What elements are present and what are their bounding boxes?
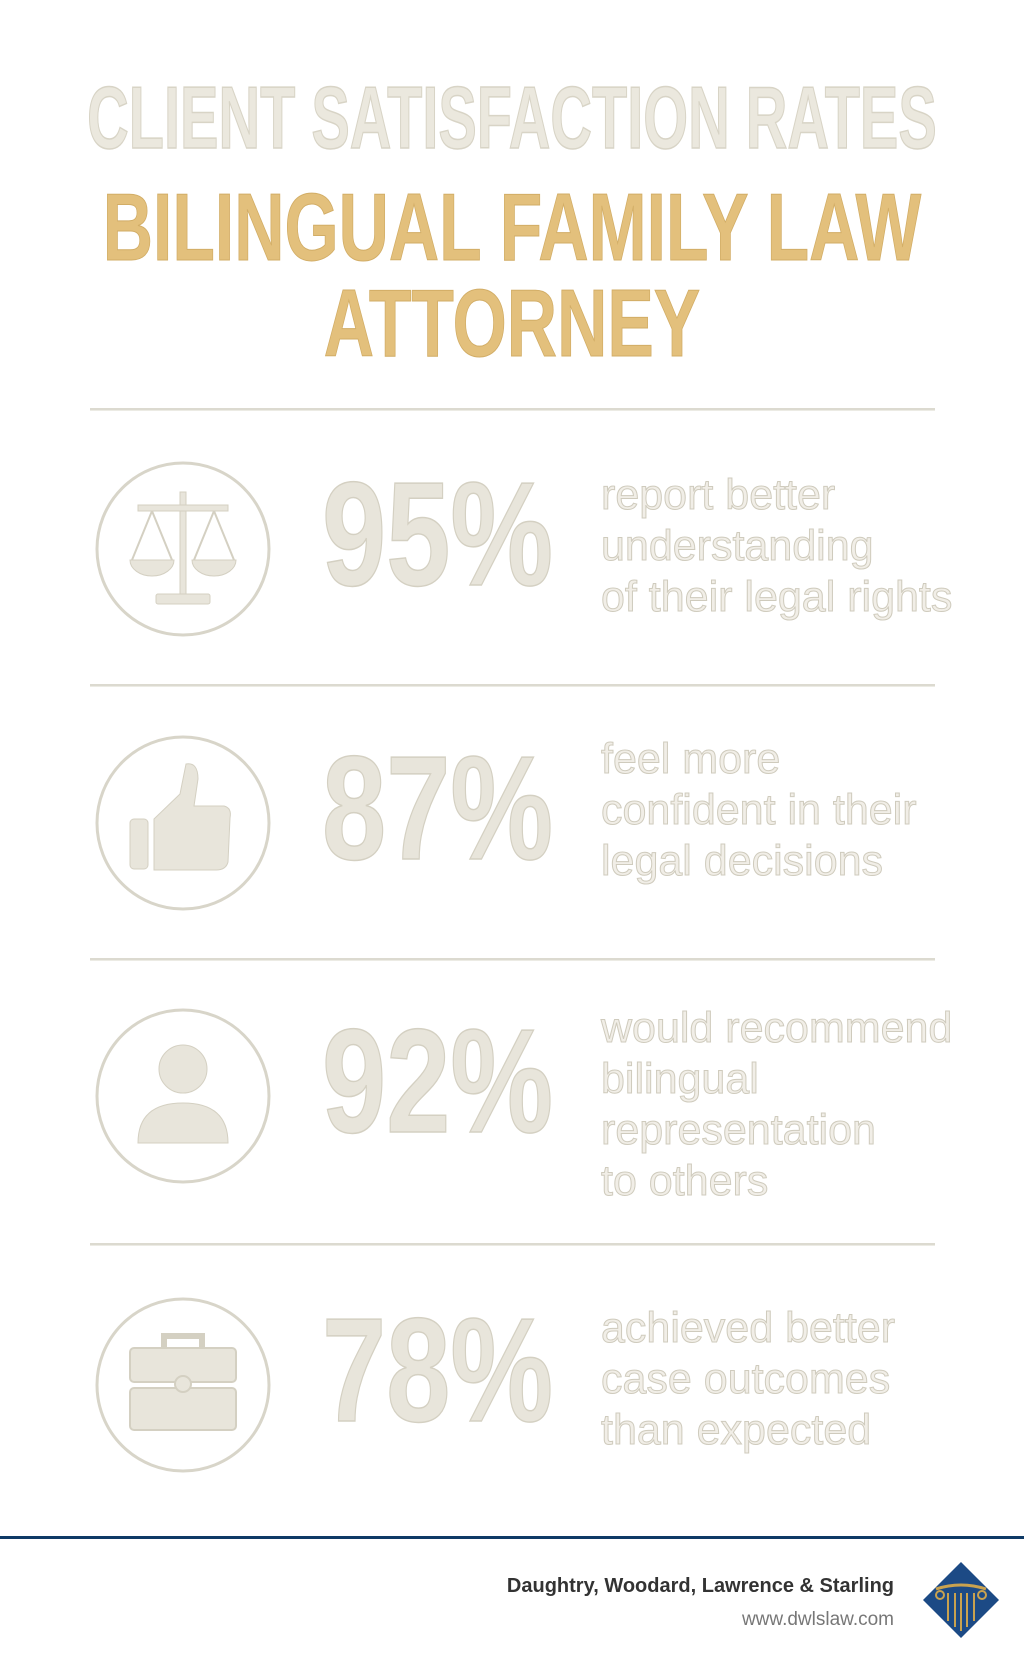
percentage: 78%: [322, 1288, 553, 1453]
description: bilingual: [601, 1055, 759, 1103]
logo: [923, 1562, 999, 1638]
footer rule: [0, 1536, 1024, 1539]
description: than expected: [601, 1406, 871, 1454]
percentage: 87%: [322, 726, 553, 891]
icon: thumbs up: [96, 736, 270, 910]
description: to others: [601, 1157, 768, 1205]
row: 95%: [96, 452, 952, 636]
row: 92%: [96, 999, 952, 1205]
description: of their legal rights: [601, 573, 952, 621]
description: [601, 735, 917, 885]
icon: person: [96, 1008, 270, 1184]
subtitle: [103, 174, 922, 377]
description: would recommend: [601, 1004, 952, 1052]
description: achieved better: [601, 1304, 895, 1352]
description: [600, 1004, 952, 1205]
icon: scales: [96, 462, 270, 636]
row: 87%: [96, 726, 917, 910]
percentage: 95%: [322, 452, 553, 617]
footer: firm name: Daughtry, Woodard, Lawrence & Starling: [507, 1575, 894, 1597]
description: case outcomes: [601, 1355, 890, 1403]
subtitle: BILINGUAL FAMILY LAW: [103, 174, 921, 281]
description: representation: [601, 1106, 876, 1154]
description: legal decisions: [601, 837, 883, 885]
description: report better: [601, 471, 835, 519]
subtitle: ATTORNEY: [324, 270, 700, 377]
row: 78%: [96, 1288, 895, 1472]
icon: briefcase: [96, 1298, 270, 1472]
title: CLIENT SATISFACTION RATES: [87, 68, 937, 167]
percentage: 92%: [322, 999, 553, 1164]
description: [601, 1304, 895, 1454]
footer: url: www.dwlslaw.com: [742, 1609, 894, 1630]
description: confident in their: [601, 786, 917, 834]
description: understanding: [601, 522, 874, 570]
description: [601, 471, 952, 621]
description: feel more: [601, 735, 780, 783]
